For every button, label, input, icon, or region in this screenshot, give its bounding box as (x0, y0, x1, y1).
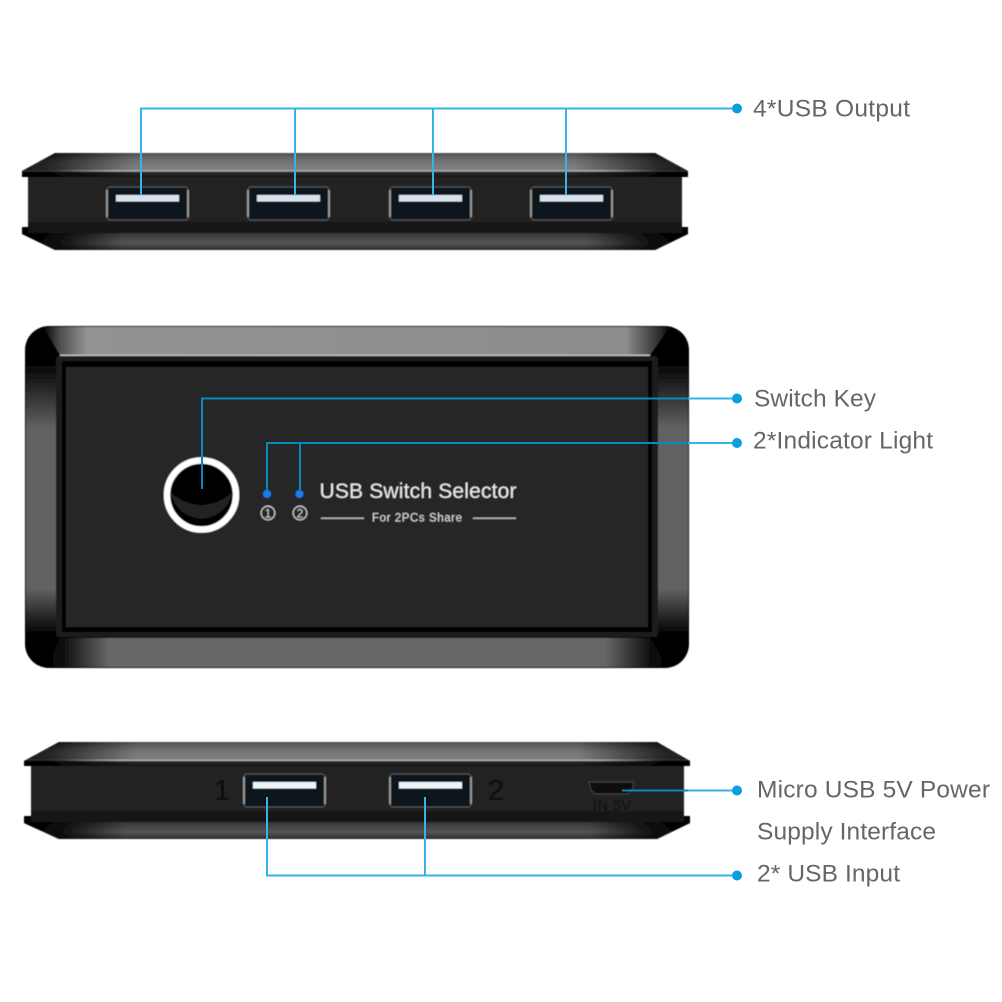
indicator LED 1 (263, 490, 271, 498)
callout: USB input (267, 797, 900, 888)
input number 1: 1 (214, 775, 230, 807)
device: input side with USB inputs (24, 742, 690, 839)
callout: indicator light: 2*Indicator Light (753, 428, 933, 454)
device: front panel (25, 326, 689, 668)
callout: USB input: 2* USB Input (757, 860, 900, 888)
indicator LED 2 (296, 490, 304, 498)
tagline rule right (473, 518, 516, 519)
callout: switch key (202, 386, 877, 489)
switch key button (167, 460, 236, 530)
port 1 (107, 187, 188, 220)
callout: micro USB power (622, 776, 990, 846)
input number 2: 2 (488, 775, 504, 807)
callout: 4 USB output (141, 96, 910, 195)
callout: 4 USB output: 4*USB Output (753, 96, 910, 122)
power port label: IN 5V (593, 797, 632, 813)
LED number 1: 1 (265, 506, 272, 520)
tagline: For 2PCs Share (372, 512, 462, 524)
panel face (66, 367, 648, 627)
tagline rule left (321, 518, 364, 519)
LED number 2: 2 (297, 506, 304, 520)
port 3 (390, 187, 471, 220)
LED number 1 (261, 506, 275, 520)
micro USB port (589, 782, 634, 794)
port 4 (531, 187, 612, 220)
callout: switch key: Switch Key (754, 386, 877, 412)
product name: USB Switch Selector (320, 480, 516, 503)
device: top view with USB outputs (22, 153, 688, 250)
LED number 2 (293, 506, 307, 520)
callout: micro USB power: Micro USB 5V Power (757, 776, 990, 804)
port 2 (248, 187, 329, 220)
callout: micro USB power: Supply Interface (757, 818, 936, 846)
input port 1 (244, 774, 325, 807)
callout: indicator light (267, 428, 933, 490)
input port 2 (390, 774, 471, 807)
